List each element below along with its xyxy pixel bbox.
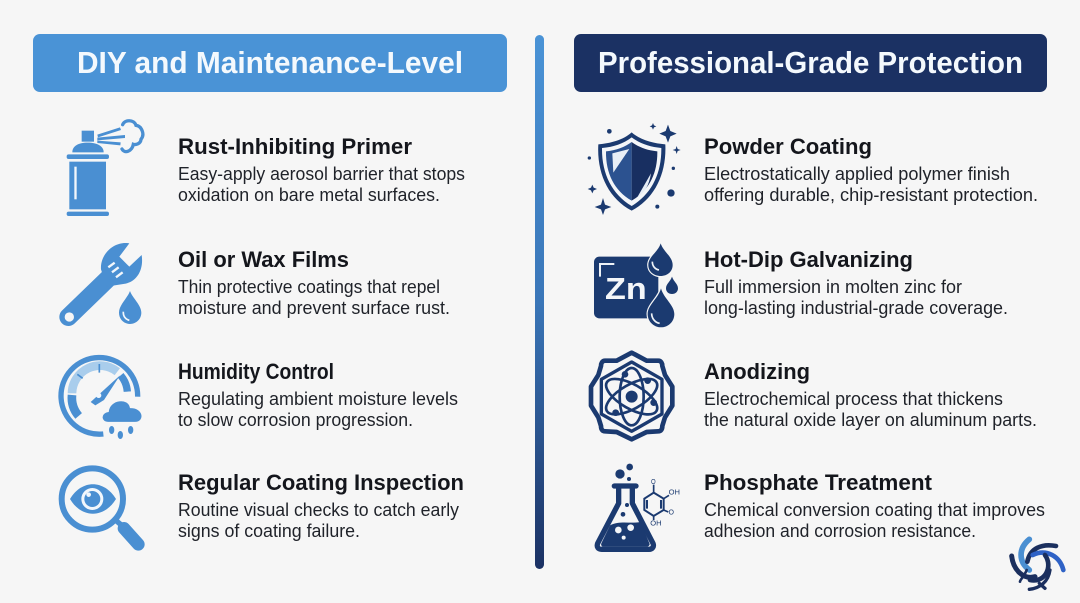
item: Oil or Wax Films: moisture and prevent surface rust. <box>178 297 450 318</box>
item: Regular Coating Inspection <box>178 470 464 541</box>
item: Powder Coating: Electrostatically applied polymer finish <box>704 163 1010 184</box>
panel: professional items <box>588 123 1045 549</box>
item: Humidity Control: Regulating ambient moisture levels <box>178 388 458 409</box>
icon: flask with molecule: OH <box>669 488 680 497</box>
item: Oil or Wax Films: Thin protective coatings that repel <box>178 276 440 297</box>
item: Phosphate Treatment <box>704 470 1045 541</box>
icon: zinc block with drops: Zn <box>605 272 647 306</box>
item: Rust-Inhibiting Primer <box>178 134 465 205</box>
item: Powder Coating <box>704 134 1038 205</box>
logo: swirl of wrenches <box>1012 539 1063 589</box>
header: Professional-Grade Protection: Professional-Grade Protection <box>598 45 1023 80</box>
icon: shield with sparkles <box>588 123 681 215</box>
item: Rust-Inhibiting Primer: Rust-Inhibiting Primer <box>178 134 412 159</box>
header: Professional-Grade Protection <box>574 34 1047 92</box>
item: Hot-Dip Galvanizing: Hot-Dip Galvanizing <box>704 247 913 272</box>
item: Regular Coating Inspection: Regular Coating Inspection <box>178 470 464 495</box>
icon: magnifier with eye <box>62 468 138 544</box>
central divider <box>535 35 544 569</box>
item: Phosphate Treatment: adhesion and corrosion resistance. <box>704 520 976 541</box>
item: Powder Coating: offering durable, chip-resistant protection. <box>704 184 1038 205</box>
icon: flask with molecule: O <box>651 477 656 486</box>
item: Humidity Control: to slow corrosion progression. <box>178 409 413 430</box>
item: Oil or Wax Films: Oil or Wax Films <box>178 247 349 272</box>
panel: DIY items <box>61 121 465 544</box>
item: Regular Coating Inspection: Routine visual checks to catch early <box>178 499 460 520</box>
item: Rust-Inhibiting Primer: oxidation on bare metal surfaces. <box>178 184 440 205</box>
item: Anodizing: Anodizing <box>704 359 810 384</box>
header: DIY and Maintenance-Level <box>33 34 507 92</box>
header: DIY and Maintenance-Level: DIY and Maintenance-Level <box>77 45 463 80</box>
item: Powder Coating: Powder Coating <box>704 134 872 159</box>
icon: humidity gauge with cloud <box>61 358 142 439</box>
item: Phosphate Treatment: Phosphate Treatment <box>704 470 932 495</box>
item: Anodizing: Electrochemical process that thickens <box>704 388 1003 409</box>
icon: wrench with drop <box>65 243 142 324</box>
item: Humidity Control <box>178 359 458 430</box>
item: Hot-Dip Galvanizing: long-lasting industrial-grade coverage. <box>704 297 1008 318</box>
item: Hot-Dip Galvanizing <box>704 247 1008 318</box>
item: Rust-Inhibiting Primer: Easy-apply aerosol barrier that stops <box>178 163 465 184</box>
icon: anodizing atom hexagon <box>591 353 672 439</box>
icon: flask with molecule: O <box>669 508 674 517</box>
item: Regular Coating Inspection: signs of coating failure. <box>178 520 360 541</box>
item: Humidity Control: Humidity Control <box>178 359 334 384</box>
icon: zinc block with drops <box>594 243 678 327</box>
item: Oil or Wax Films <box>178 247 450 318</box>
icon: spray can <box>67 121 143 216</box>
item: Phosphate Treatment: Chemical conversion coating that improves <box>704 499 1045 520</box>
item: Anodizing <box>704 359 1037 430</box>
icon: flask with molecule: OH <box>650 519 662 528</box>
item: Hot-Dip Galvanizing: Full immersion in molten zinc for <box>704 276 962 297</box>
item: Anodizing: the natural oxide layer on aluminum parts. <box>704 409 1037 430</box>
icon: flask with molecule <box>597 464 680 549</box>
